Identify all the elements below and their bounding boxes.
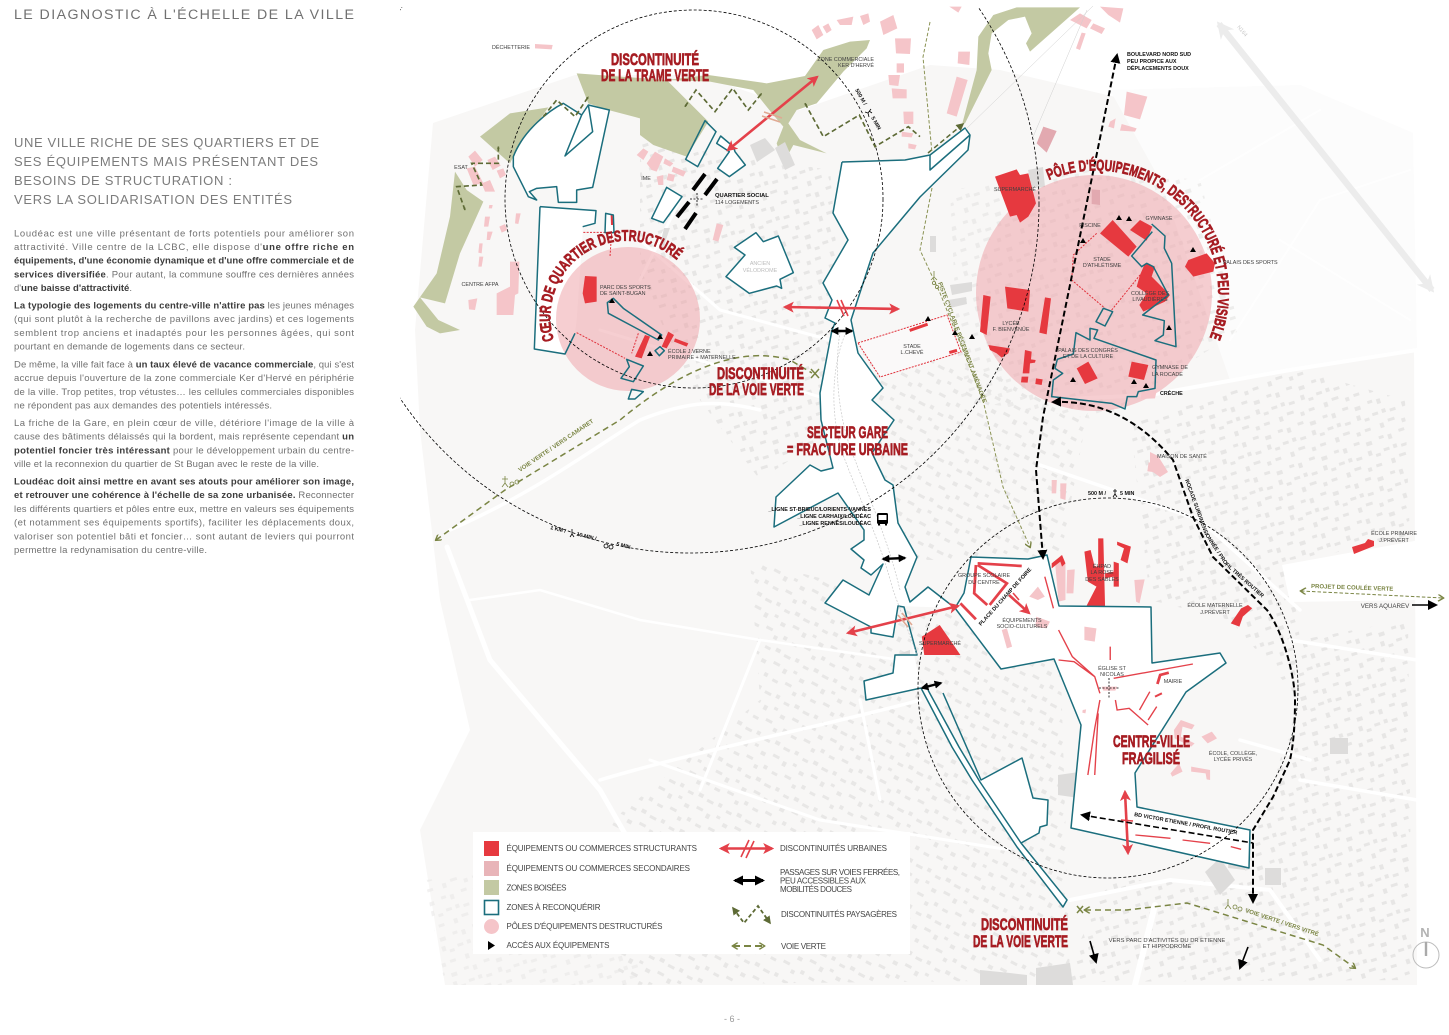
legend symbol: voie verte bbox=[733, 942, 826, 951]
legend symbol: discontinuités urbaines: DISCONTINUITÉS URBAINES bbox=[780, 844, 887, 853]
map labels north-west: KER D'HERVÉ bbox=[838, 62, 874, 69]
distance circle: 500 m centre bbox=[918, 498, 1298, 878]
legend swatch: zones à reconquérir bbox=[484, 900, 601, 914]
legend swatch: accès: ACCÈS AUX ÉQUIPEMENTS bbox=[506, 941, 610, 950]
rotated labels: 500 M / bbox=[853, 88, 868, 107]
north arrow: N bbox=[1420, 925, 1430, 940]
voie verte south-east bbox=[1085, 903, 1355, 968]
page number: - 6 - bbox=[724, 1014, 740, 1024]
section heading: BESOINS DE STRUCTURATION : bbox=[14, 173, 232, 188]
map labels centre and east: ÉQUIPEMENTS bbox=[1002, 617, 1042, 624]
text block: introduction: services diversifiée. Pour autant, la commune souffre ces dernières années bbox=[14, 269, 354, 280]
map labels north-west: DÉCHETTERIE bbox=[492, 44, 530, 51]
text block: vacance commerciale: de la ville. Trop petites, trop vétustes… les cellules commerciales disponibles bbox=[14, 387, 354, 398]
cross: church and bus bbox=[877, 513, 1119, 698]
rotated labels: 5 MIN bbox=[869, 116, 882, 131]
map labels north-west: PARC DES SPORTS bbox=[600, 285, 651, 291]
map labels pole: STADE bbox=[1093, 257, 1111, 263]
title: secteur gare: SECTEUR GARE bbox=[807, 424, 888, 442]
map labels pole: LIVAUDIÈRES bbox=[1132, 296, 1168, 303]
map labels centre and east: SOCIO-CULTURELS bbox=[997, 624, 1048, 630]
text block: vacance commerciale: ne répondent pas aux demandes des potentiels intéressés. bbox=[14, 401, 272, 412]
text block: introduction: attractivité. Ville centre de la LCBC, elle dispose d'une offre riche en bbox=[14, 242, 354, 253]
legend swatch: structurants bbox=[484, 841, 697, 856]
rotated labels: VOIE VERTE / VERS VITRÉ bbox=[1246, 908, 1319, 936]
map labels north-west: 114 LOGEMENTS bbox=[715, 200, 759, 206]
icon: bus bbox=[877, 513, 888, 526]
map labels north-west: ESAT bbox=[454, 165, 469, 171]
title: discontinuité de la voie verte (nord): DE LA VOIE VERTE bbox=[709, 381, 804, 399]
map labels centre and east: LYCÉE PRIVÉS bbox=[1214, 756, 1253, 763]
title: secteur gare: = FRACTURE URBAINE bbox=[787, 441, 908, 459]
section heading: UNE VILLE RICHE DE SES QUARTIERS ET DE bbox=[14, 135, 319, 150]
black rail passage arrows bbox=[832, 331, 941, 688]
text block: conclusion: et retrouver une cohérence à l'échelle de sa zone urbanisée. Reconnecter bbox=[14, 490, 354, 501]
text block: friche de la gare: ville et la reconnexion du quartier de St Bugan avec le reste de la ville. bbox=[14, 459, 319, 470]
map labels centre and east: J.PRÉVERT bbox=[1379, 537, 1409, 544]
map labels centre and east: VERS PARC D'ACTIVITÉS DU DR ETIENNE bbox=[1109, 937, 1225, 944]
rotated labels: PROJET DE COULÉE VERTE bbox=[1311, 582, 1394, 593]
map labels north-west: STADE bbox=[903, 344, 921, 350]
rotated labels: 1 KM / bbox=[550, 525, 567, 535]
secondary equipment buildings bbox=[467, 7, 1217, 780]
rotated labels: BD VICTOR ETIENNE / PROFIL ROUTIER bbox=[1134, 812, 1238, 834]
highway N164 bbox=[1219, 24, 1432, 290]
map labels centre and east: DES SABLES bbox=[1085, 577, 1119, 583]
text block: logements: pourtant en demande de logements dans ce secteur. bbox=[14, 342, 245, 353]
legend bbox=[473, 832, 910, 954]
map labels pole: PALAIS DES CONGRÈS bbox=[1058, 347, 1118, 354]
title: centre-ville fragilisé: FRAGILISÉ bbox=[1122, 749, 1180, 768]
map labels centre and east: SUPERMARCHÉ bbox=[919, 640, 961, 647]
train lines label: _LIGNE CARHAIX/LOUDÉAC bbox=[796, 512, 871, 520]
legend swatch: zones à reconquérir: ZONES À RECONQUÉRIR bbox=[506, 903, 601, 912]
boulevard nord sud label: PEU PROPICE AUX bbox=[1127, 59, 1177, 65]
map labels pole: GYMNASE DE bbox=[1152, 365, 1188, 371]
page title: LE DIAGNOSTIC À L'ÉCHELLE DE LA VILLE bbox=[14, 6, 354, 23]
map labels north-west: VÉLODROME bbox=[743, 267, 778, 274]
rotated labels: 5 MIN bbox=[615, 542, 631, 551]
map labels north-west: DE SAINT-BUGAN bbox=[600, 291, 646, 297]
map labels centre and east: J.PRÉVERT bbox=[1200, 609, 1230, 616]
zones à reconquérir: teal outlines bbox=[513, 103, 1250, 907]
rotated labels bbox=[518, 88, 1416, 962]
rocade dashed bbox=[1053, 402, 1295, 902]
text block: friche de la gare bbox=[14, 418, 355, 470]
text block: vacance commerciale: accrue depuis l'ouverture de la zone commerciale Ker d'Hervé en périphérie bbox=[14, 373, 354, 384]
rotated labels: 10 MIN / bbox=[576, 532, 597, 543]
text block: logements: semblent trop anciens et inadaptés pour les personnes âgées, qui sont bbox=[14, 328, 354, 339]
rotated labels: ROCADE SURDIMENSIONNÉE / PROFIL TRÈS ROUTIER bbox=[1185, 479, 1264, 598]
legend swatch: structurants: ÉQUIPEMENTS OU COMMERCES STRUCTURANTS bbox=[506, 844, 697, 853]
boulevard nord sud dashed bbox=[1036, 55, 1117, 558]
map labels north-west: IME bbox=[641, 176, 651, 182]
title: discontinuité de la trame verte bbox=[601, 50, 709, 85]
map labels pole: LA ROCADE bbox=[1152, 372, 1183, 378]
map labels centre and east: LA ROSE bbox=[1090, 570, 1114, 576]
buildings in grey bbox=[660, 138, 1348, 985]
map labels north-west: ÉCOLE J.VERNE bbox=[668, 348, 711, 355]
rail tracks bbox=[834, 6, 1093, 655]
legend symbol: passages bbox=[735, 868, 900, 894]
structuring equipment buildings bbox=[583, 169, 1374, 655]
map labels north-west: QUARTIER SOCIAL bbox=[715, 193, 769, 199]
text block: logements bbox=[14, 300, 354, 353]
section heading: SES ÉQUIPEMENTS MAIS PRÉSENTANT DES bbox=[14, 154, 318, 169]
boulevard nord sud label bbox=[1127, 52, 1191, 72]
boulevard nord sud label: DÉPLACEMENTS DOUX bbox=[1127, 64, 1189, 72]
legend swatch: zones boisées: ZONES BOISÉES bbox=[506, 884, 566, 892]
voie verte west bbox=[436, 356, 812, 540]
rotated labels: 500 M / bbox=[1088, 491, 1106, 497]
map labels centre and east bbox=[919, 453, 1417, 950]
red street discontinuity lines bbox=[960, 563, 1241, 849]
legend symbol: passages: MOBILITÉS DOUCES bbox=[780, 885, 852, 894]
map labels pole: F. BIENVENÜE bbox=[993, 326, 1030, 333]
title: discontinuité de la trame verte: DE LA TRAME VERTE bbox=[601, 67, 709, 85]
legend symbol: voie verte: VOIE VERTE bbox=[781, 942, 826, 951]
title: centre-ville fragilisé bbox=[1113, 733, 1190, 768]
map labels centre and east: ÉHPAD bbox=[1093, 563, 1111, 570]
stade L.Chevé red bars bbox=[909, 323, 957, 354]
rotated labels: 5 MIN bbox=[1120, 491, 1134, 497]
map labels centre and east: NICOLAS bbox=[1100, 672, 1124, 678]
pôle de quartier pink circle bbox=[556, 247, 700, 391]
rotated labels: VOIE VERTE / VERS CAMARET bbox=[518, 418, 593, 472]
legend symbol: passages: PASSAGES SUR VOIES FERRÉES, bbox=[780, 868, 900, 877]
map labels north-west bbox=[454, 44, 924, 361]
map labels pole: CRÈCHE bbox=[1160, 389, 1183, 397]
section heading: VERS LA SOLIDARISATION DES ENTITÉS bbox=[14, 192, 292, 207]
X discontinuity marks bbox=[811, 369, 1083, 913]
text block: friche de la gare: La friche de la Gare, en plein cœur de ville, détériore l'image de la ville à bbox=[14, 418, 355, 429]
distance circle: 1 km bbox=[341, 0, 1039, 553]
distance circle: 500 m north bbox=[505, 10, 883, 388]
rotated labels: PISTE CYCLABLE RÉCEMMENT AMÉNAGÉE bbox=[938, 282, 987, 403]
boulevard Victor Etienne dashed bbox=[1082, 815, 1253, 843]
curved title: coeur de quartier: CŒUR DE QUARTIER DESTRUCTURÉ bbox=[539, 230, 685, 342]
access triangles bbox=[609, 215, 1196, 388]
section heading bbox=[14, 135, 319, 207]
map labels pole: PALAIS DES SPORTS bbox=[1223, 260, 1278, 266]
legend swatch: secondaires: ÉQUIPEMENTS OU COMMERCES SECONDAIRES bbox=[506, 864, 690, 873]
map labels centre and east: GROUPE SCOLAIRE bbox=[958, 573, 1010, 579]
text block: friche de la gare: cause des bâtiments délaissés qui la bordent, mais représente cependant un bbox=[14, 432, 354, 443]
map labels pole: SUPERMARCHÉ bbox=[994, 186, 1036, 193]
map labels pole: ET DE LA CULTURE bbox=[1063, 354, 1113, 360]
map labels pole: LYCÉE bbox=[1002, 320, 1020, 327]
map labels north-west: ZONE COMMERCIALE bbox=[817, 57, 874, 63]
text block: logements: (qui sont plutôt à la recherche de pavillons avec jardins) et ces logements bbox=[14, 314, 354, 325]
map labels centre and east: ET HIPPODROME bbox=[1143, 944, 1191, 950]
red dotted perimeters bbox=[577, 232, 1140, 377]
text block: vacance commerciale bbox=[14, 360, 354, 412]
zones à reconquérir: white fills bbox=[513, 103, 1250, 907]
boulevard nord sud label: BOULEVARD NORD SUD bbox=[1127, 52, 1191, 58]
black direction arrows bbox=[1090, 605, 1436, 968]
legend symbol: discontinuités paysagères bbox=[733, 906, 897, 923]
legend swatch: pôles bbox=[484, 919, 662, 934]
title: discontinuité de la voie verte (sud) bbox=[973, 915, 1068, 951]
map labels north-west: L.CHEVÉ bbox=[900, 349, 924, 356]
train lines label: _LIGNE ST-BRIEUC/LORIENTS-VANNES bbox=[767, 507, 871, 513]
legend symbol: discontinuités paysagères: DISCONTINUITÉS PAYSAGÈRES bbox=[781, 910, 897, 919]
text block: conclusion: valoriser son potentiel bâti et foncier… sont autant de leviers qui pourront bbox=[14, 531, 354, 542]
map labels pole bbox=[993, 186, 1278, 397]
text block: logements: La typologie des logements du centre-ville n'attire pas les jeunes ménages bbox=[14, 300, 354, 312]
map labels pole: PISCINE bbox=[1079, 223, 1101, 229]
text block: conclusion: les différents quartiers et pôles entre eux, mettre en valeurs ses équipements bbox=[14, 504, 354, 515]
map labels centre and east: MAIRIE bbox=[1164, 679, 1183, 685]
legend swatch: secondaires bbox=[484, 861, 690, 876]
train lines label bbox=[767, 507, 871, 527]
text block: conclusion: Loudéac doit ainsi mettre en avant ses atouts pour améliorer son image, bbox=[14, 476, 354, 488]
map labels centre and east: ÉCOLE MATERNELLE bbox=[1187, 602, 1243, 609]
map labels centre and east: VERS AQUAREV bbox=[1361, 603, 1410, 610]
title: discontinuité de la voie verte (nord): DISCONTINUITÉ bbox=[717, 364, 804, 383]
text block: introduction: Loudéac est une ville présentant de forts potentiels pour améliorer son bbox=[14, 228, 354, 240]
map base bbox=[415, 65, 1420, 985]
text block: conclusion: (et notamment ses équipements sportifs), faciliter les déplacements doux, bbox=[14, 518, 354, 529]
map labels pole: D'ATHLÉTISME bbox=[1083, 262, 1122, 269]
icons: walker on circles bbox=[570, 109, 1117, 549]
train lines label: _LIGNE RENNES/LOUDÉAC bbox=[798, 519, 871, 527]
text block: introduction: d'une baisse d'attractivité. bbox=[14, 283, 132, 294]
legend swatch: pôles: PÔLES D'ÉQUIPEMENTS DESTRUCTURÉS bbox=[506, 922, 662, 931]
legend swatch: zones boisées bbox=[484, 880, 566, 895]
map labels north-west: ANCIEN bbox=[750, 261, 770, 267]
text block: vacance commerciale: De même, la ville fait face à un taux élevé de vacance commerciale, qui s'est bbox=[14, 360, 354, 370]
black bars: quartier social bbox=[677, 174, 717, 229]
map labels centre and east: ÉCOLE PRIMAIRE bbox=[1371, 530, 1417, 537]
curved title: pôle d'équipements: PÔLE D'ÉQUIPEMENTS, DESTRUCTURÉ ET PEU VISIBLE bbox=[1045, 156, 1230, 342]
legend symbol: discontinuités urbaines bbox=[721, 840, 887, 858]
map labels centre and east: ÉGLISE ST bbox=[1098, 665, 1127, 672]
landscape discontinuities zigzags bbox=[457, 88, 963, 210]
highway N164: N164 bbox=[1235, 24, 1248, 38]
title: discontinuité de la trame verte: DISCONTINUITÉ bbox=[611, 50, 699, 69]
map labels pole: COLLÈGE DES bbox=[1131, 290, 1169, 297]
map labels centre and east: DU CENTRE bbox=[968, 580, 1000, 586]
green zones bbox=[413, 7, 1080, 333]
text block: friche de la gare: potentiel foncier très intéressant pour le développement urbain du centre- bbox=[14, 445, 354, 456]
red discontinuity arrows bbox=[728, 77, 1133, 853]
map labels pole: GYMNASE bbox=[1146, 216, 1173, 222]
rotated labels: PLACE DU CHAMP DE FOIRE bbox=[978, 567, 1033, 627]
text block: introduction bbox=[14, 228, 354, 294]
map labels centre and east: ÉCOLE, COLLÈGE, bbox=[1209, 750, 1258, 757]
piste cyclable bbox=[920, 22, 1030, 547]
title: discontinuité de la voie verte (sud): DE LA VOIE VERTE bbox=[973, 933, 1068, 951]
title: discontinuité de la voie verte (sud): DISCONTINUITÉ bbox=[981, 915, 1068, 934]
map labels north-west: CENTRE AFPA bbox=[461, 282, 499, 288]
text block: conclusion bbox=[14, 476, 354, 556]
pôle d'équipements pink circle bbox=[976, 175, 1212, 411]
coulée verte arrow bbox=[1301, 591, 1443, 598]
title: secteur gare bbox=[787, 424, 908, 459]
icons: walker and bike bbox=[502, 271, 1242, 911]
title: centre-ville fragilisé: CENTRE-VILLE bbox=[1113, 733, 1190, 751]
map labels centre and east: MAISON DE SANTÉ bbox=[1157, 453, 1207, 460]
text block: conclusion: permettre la redynamisation du centre-ville. bbox=[14, 545, 207, 556]
title: discontinuité de la voie verte (nord) bbox=[709, 364, 804, 399]
map labels north-west: PRIMAIRE + MATERNELLE bbox=[668, 355, 736, 361]
north arrow bbox=[1413, 925, 1439, 968]
text block: introduction: équipements, d'une économie dynamique et d'une offre commerciale et de bbox=[14, 256, 354, 267]
legend symbol: passages: PEU ACCESSIBLES AUX bbox=[780, 876, 867, 886]
